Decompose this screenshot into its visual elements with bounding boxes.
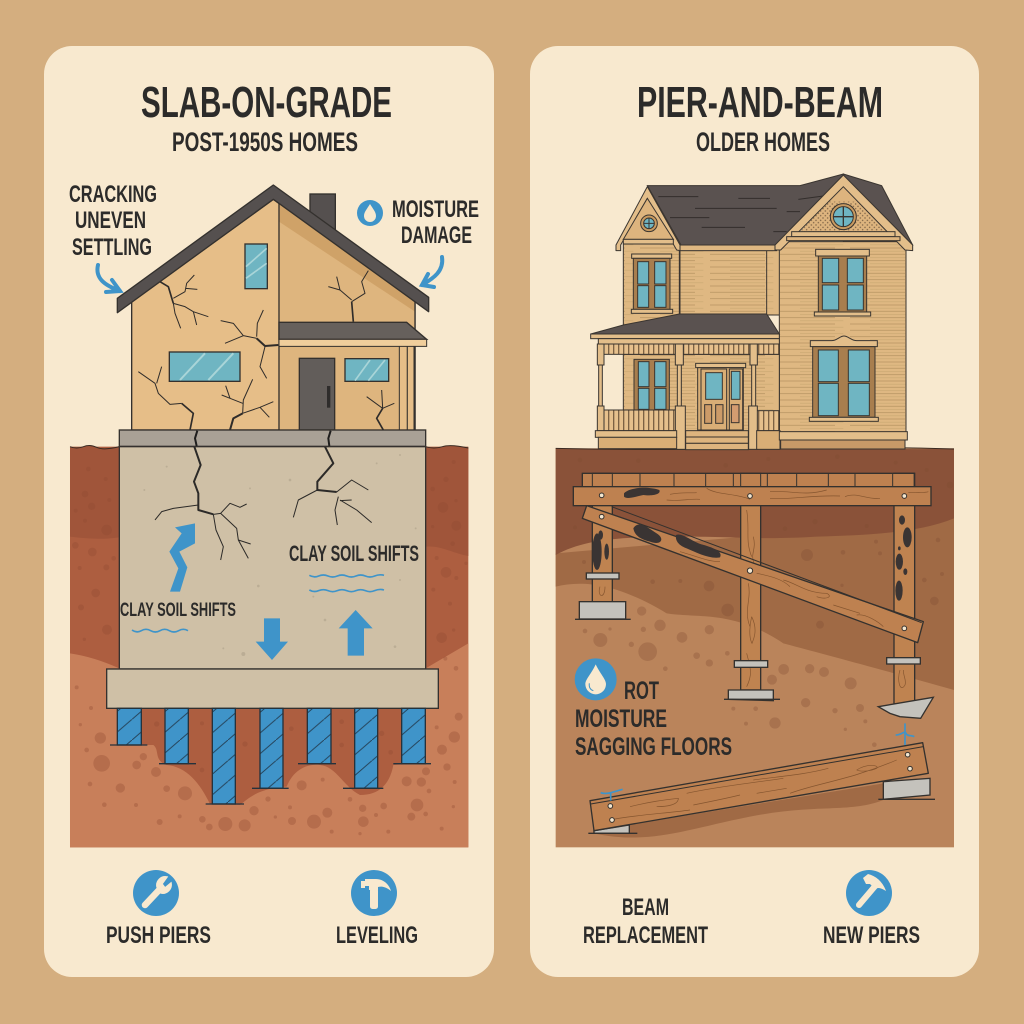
moisture label: MOISTURE: [575, 705, 667, 733]
wall cracks: [138, 271, 394, 430]
callout: cracking uneven settling: [69, 181, 157, 292]
porch columns: [399, 346, 414, 430]
rot label: ROT: [624, 677, 659, 705]
clay soil label left: CLAY SOIL SHIFTS: [120, 600, 236, 621]
footing: broken right: [878, 697, 933, 718]
house: slab home: [117, 185, 429, 446]
lower sagging beam: [590, 743, 928, 831]
title: slab-on-grade: SLAB-ON-GRADE: [141, 78, 392, 127]
new piers label: NEW PIERS: [823, 922, 920, 949]
posts: [592, 473, 915, 704]
concrete footings: [579, 602, 933, 718]
lower ground lines: [588, 799, 935, 833]
soil pebbles: [72, 460, 468, 835]
panel card: pier: [530, 46, 979, 977]
diagonal cracked beam: [582, 506, 923, 643]
post: left: [592, 473, 612, 602]
right wall shade: [279, 203, 415, 430]
door: [299, 358, 335, 430]
left gable: [616, 187, 680, 251]
roof shadow: [279, 203, 415, 312]
front door: [696, 363, 746, 430]
panel: slab-on-grade: [44, 46, 494, 977]
replacement label: REPLACEMENT: [583, 922, 708, 949]
post: center: [741, 473, 761, 690]
panel card: slab: [44, 46, 494, 977]
title: pier-and-beam: PIER-AND-BEAM: [637, 78, 883, 127]
subtitle: post-1950s homes: POST-1950S HOMES: [172, 127, 358, 157]
uneven text: UNEVEN: [75, 207, 146, 234]
house: victorian home: [591, 174, 913, 450]
porch frieze: [603, 344, 779, 354]
porch columns: [597, 344, 757, 449]
left wing wall: [623, 244, 679, 326]
post: right: [894, 473, 915, 704]
icon: hammer: [351, 870, 397, 916]
concrete specks: [143, 454, 417, 698]
icon: large water drop: [575, 658, 617, 700]
soil background: [70, 445, 468, 847]
center wall: [680, 250, 780, 315]
top window: [245, 244, 267, 289]
icon: water drop: [357, 200, 383, 226]
center pilaster: [765, 250, 768, 314]
wall edge: [413, 302, 417, 430]
porch fascia: [279, 339, 427, 346]
panel: pier-and-beam: [530, 46, 979, 977]
right main wall: [779, 242, 906, 432]
icon: hammer diagonal: [846, 870, 892, 916]
main roof: [647, 174, 843, 250]
slab: [119, 430, 426, 446]
window: left upper: [631, 254, 673, 313]
chimney: [310, 194, 335, 231]
arrow: up: [339, 610, 373, 656]
subtitle: older homes: OLDER HOMES: [696, 127, 830, 157]
porch floor: [595, 431, 780, 449]
icon: wrench: [133, 870, 179, 916]
repair: beam replacement: [583, 894, 708, 949]
soil layers: [556, 447, 954, 847]
lower footing blocks: [594, 778, 930, 833]
porch fascia: [598, 339, 779, 344]
moisture text: MOISTURE: [392, 196, 479, 223]
wood grain: [599, 510, 905, 688]
footing ground lines: [575, 619, 780, 699]
footing: left: [579, 602, 626, 619]
right gable: [775, 175, 913, 251]
push piers: [110, 708, 431, 804]
beam label: BEAM: [622, 894, 669, 921]
main beam: [573, 487, 931, 506]
porch window: [345, 359, 389, 381]
leveling label: LEVELING: [336, 922, 418, 949]
window: right lower: [809, 336, 878, 421]
walls: [132, 199, 415, 430]
footing: center: [728, 690, 773, 701]
house base: [779, 432, 907, 449]
foundation cracks: [155, 447, 372, 560]
porch roof: [591, 314, 779, 334]
settling text: SETTLING: [72, 234, 152, 261]
slab cracks: [195, 431, 331, 446]
porch eave: [591, 334, 779, 339]
concrete foundation wall: [119, 447, 426, 669]
water waves: [132, 575, 384, 632]
arrow: down: [256, 618, 288, 660]
wide window: [169, 352, 240, 381]
post collars: [586, 573, 920, 667]
blue water marks: [601, 723, 914, 801]
sagging floors label: SAGGING FLOORS: [575, 733, 732, 761]
damage text: DAMAGE: [401, 222, 472, 249]
push piers label: PUSH PIERS: [106, 922, 211, 949]
roof shingle lines: [658, 196, 823, 232]
rot stains on posts: [592, 515, 912, 601]
concrete footing: [107, 669, 438, 708]
arrow: to left roof: [97, 265, 120, 292]
arrow: zigzag up: [169, 523, 195, 592]
repair: new piers: [823, 870, 920, 949]
steps: [686, 431, 748, 450]
underground cross-section: [556, 447, 954, 847]
porch roof: [279, 322, 427, 339]
porch back wall: [623, 354, 779, 431]
soil and foundation cross-section: [70, 445, 468, 847]
wall divider: [277, 203, 281, 430]
porch railings: [603, 410, 779, 431]
arrow: to right roof: [422, 257, 442, 287]
rear roof: [843, 174, 913, 245]
main roof: [117, 185, 429, 313]
callout: moisture damage: [357, 196, 479, 287]
window: porch left: [634, 359, 669, 410]
window: right upper: [814, 249, 871, 316]
repair: leveling: [336, 870, 418, 949]
clay soil label right: CLAY SOIL SHIFTS: [289, 541, 419, 566]
cracking text: CRACKING: [69, 181, 157, 208]
repair: push piers: [106, 870, 211, 949]
center eave: [680, 245, 777, 251]
joist row: [582, 473, 914, 487]
soil pebbles: [573, 454, 953, 747]
